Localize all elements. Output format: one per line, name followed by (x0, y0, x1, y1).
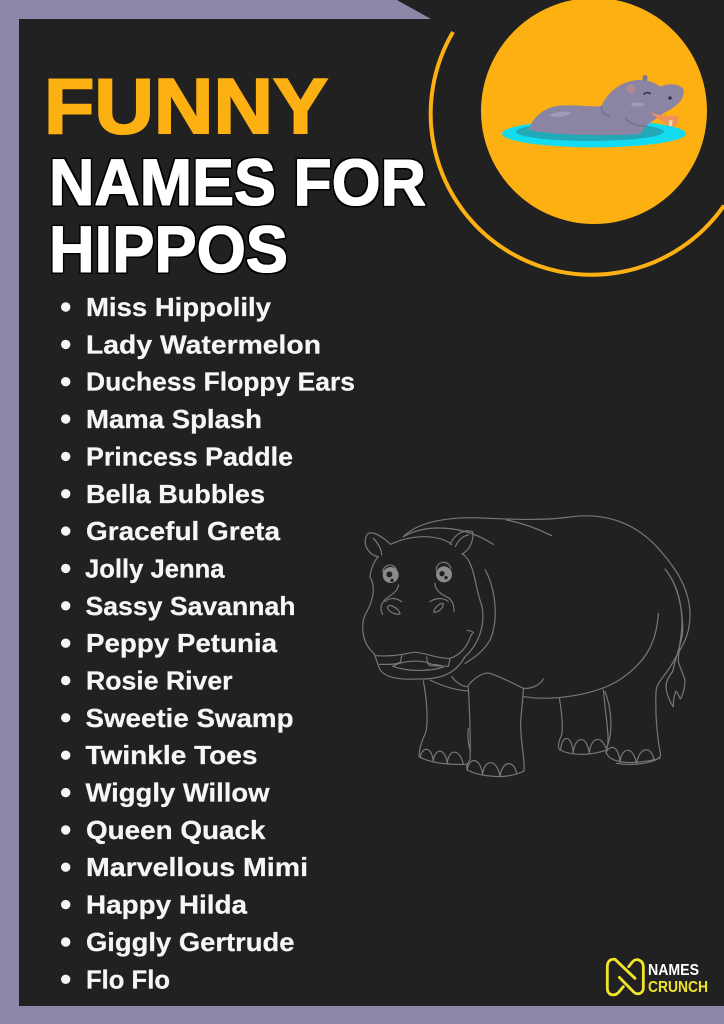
name labels: Sassy Savannah (86, 591, 296, 621)
logo: Names Crunch (607, 959, 708, 996)
hippo mouth (650, 113, 678, 127)
name labels: Twinkle Toes (86, 740, 258, 770)
hippo eye (643, 93, 651, 95)
hippo neck line (403, 520, 552, 663)
name labels: Bella Bubbles (86, 479, 265, 509)
hippo tooth (669, 120, 673, 126)
water pool (502, 120, 686, 147)
hippo rear legs (558, 690, 611, 754)
name labels: Rosie River (86, 666, 232, 696)
name labels: Sweetie Swamp (86, 703, 294, 733)
decorative ring arc (431, 32, 724, 275)
hippo top ear (642, 75, 648, 81)
hippo front toes (420, 749, 517, 777)
hippo body (528, 80, 684, 135)
hippo back and belly (403, 516, 690, 764)
logo text CRUNCH: CRUNCH (648, 979, 708, 996)
title (44, 62, 426, 286)
name labels: Princess Paddle (86, 441, 293, 471)
name labels: Graceful Greta (86, 516, 281, 546)
name labels: Jolly Jenna (85, 553, 225, 583)
hippo left eye (383, 565, 399, 583)
name labels: Peppy Petunia (86, 628, 278, 658)
hippo left ear (365, 533, 391, 557)
icon: hippo in water (502, 75, 686, 147)
name labels: Lady Watermelon (86, 329, 321, 359)
name labels: Flo Flo (86, 964, 170, 994)
name labels: Happy Hilda (86, 890, 248, 920)
hippo highlights (549, 102, 645, 117)
title line: NAMES FOR: NAMES FOR (49, 145, 426, 219)
hippo ear (627, 85, 635, 93)
name labels: Miss Hippolily (86, 292, 272, 322)
name labels: Mama Splash (86, 404, 262, 434)
hippo smile and mouth (376, 630, 473, 670)
orange circle (481, 0, 707, 224)
title line: FUNNY: FUNNY (44, 62, 328, 150)
name labels: Wiggly Willow (86, 778, 270, 808)
hippo neck folds (602, 106, 647, 126)
bullets (61, 302, 70, 984)
title line: HIPPOS: HIPPOS (49, 212, 288, 286)
hippo front legs (419, 673, 543, 776)
name labels (85, 292, 355, 994)
hippo tail (665, 569, 685, 707)
hippo right ear (450, 531, 473, 554)
name labels: Queen Quack (86, 815, 266, 845)
hippo nostril (668, 96, 672, 100)
logo mark (607, 959, 643, 995)
hippo rear toes (561, 739, 660, 764)
hippo head (363, 537, 483, 679)
hippo right eye (436, 562, 452, 582)
logo text NAMES: NAMES (648, 962, 699, 979)
names list (61, 292, 355, 994)
name labels: Marvellous Mimi (86, 852, 308, 882)
pool shadow (516, 122, 664, 141)
hippo snout and nostrils (381, 583, 454, 614)
illustration: outlined hippo (363, 516, 690, 777)
name labels: Duchess Floppy Ears (86, 367, 355, 397)
name labels: Giggly Gertrude (86, 927, 294, 957)
